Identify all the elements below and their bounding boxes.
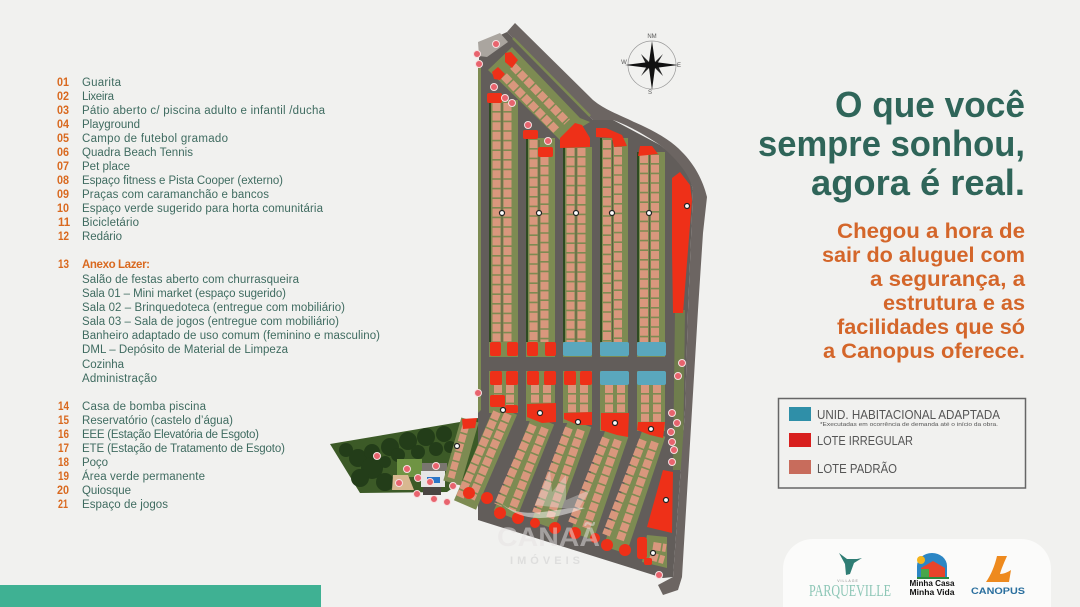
list item 06: Quadra Beach Tennis [82,147,193,159]
list item 07 [57,161,130,173]
compass rose: NM [647,34,657,40]
list item 01: 01 [57,77,70,89]
subheading: sair do aluguel com [822,244,1025,267]
list item 08: Espaço fitness e Pista Cooper (externo) [82,175,283,187]
legend: standard lot: LOTE PADRÃO [817,461,897,476]
location markers [374,40,686,578]
subheading: facilidades que só [837,316,1025,339]
subheading: Chegou a hora de [837,220,1025,243]
compass rose: S [648,90,652,96]
list item 19: 19 [58,471,69,483]
list item 12: 12 [58,231,69,243]
lot column 2 [526,138,555,357]
list item 13: anexo lazer: 13 [58,259,69,271]
list item 12 [58,231,122,243]
lot column 5 [637,152,665,357]
list item 08: 08 [57,175,70,187]
logo: Minha Casa Minha Vida: Minha Casa [910,578,955,588]
lot column 1 [489,100,518,357]
list item 13: anexo lazer: Anexo Lazer: [82,259,150,271]
list item 09: Praças com caramanchão e bancos [82,189,269,201]
inner green verge [513,38,590,116]
legend: irregular lot: LOTE IRREGULAR [817,433,913,448]
diagonal lot strips [451,410,655,550]
square markers [454,204,690,556]
bottom green bar [0,585,321,607]
list item 10: Espaço verde sugerido para horta comunitária [82,203,324,215]
legend: irregular lot [789,433,913,448]
site base [478,32,693,578]
list item 12: Redário [82,231,122,243]
list item 14: 14 [58,401,70,413]
list item 18: Poço [82,457,108,469]
irregular lots (red) [462,52,692,556]
list item 04: Playground [82,119,140,131]
list item 04 [57,119,140,131]
list item 15: Reservatório (castelo d’água) [82,415,233,427]
list item 16: 16 [58,429,69,441]
legend: adapted unit: *Executadas em ocorrência de demanda até o início da obra. [820,422,999,428]
subheading: estrutura e as [883,292,1025,315]
watermark: Canaã imóveis [497,470,600,567]
logo: Parque Ville: VILLAGE [837,579,859,583]
list item 20: Quiosque [82,485,131,497]
compass rose: W [621,60,627,66]
list item 14: Casa de bomba piscina [82,401,207,413]
list item 19: Área verde permanente [82,470,205,483]
list item 05: 05 [57,133,70,145]
list item 16: EEE (Estação Elevatória de Esgoto) [82,429,259,441]
amenities list [57,77,380,511]
logo: Canopus: CANOPUS [971,586,1025,597]
list item 13: anexo lazer: Banheiro adaptado de uso comum (feminino e masculino) [82,330,380,342]
logo card [783,539,1051,607]
list item 13: anexo lazer: DML – Depósito de Material de Limpeza [82,344,289,356]
list item 21: Espaço de jogos [82,499,168,511]
logo: Parque Ville [809,553,891,600]
list item 01 [57,77,122,89]
list item 03: Pátio aberto c/ piscina adulto e infantil /ducha [82,105,326,117]
list item 20: 20 [57,485,69,497]
list item 02: 02 [57,91,69,103]
list item 13: anexo lazer: Administração [82,373,157,385]
list item 13: anexo lazer: Sala 01 – Mini market (espaço sugerido) [82,288,286,300]
subheading: a segurança, a [870,268,1025,291]
legend [778,398,1026,488]
list item 01: Guarita [82,77,122,89]
legend: adapted unit [789,407,1000,428]
logo: Minha Casa Minha Vida: Minha Vida [910,587,955,597]
headline: agora é real. [811,162,1025,203]
list item 17: ETE (Estação de Tratamento de Esgoto) [82,443,285,455]
headline: sempre sonhou, [758,123,1025,164]
list item 13: anexo lazer: Salão de festas aberto com churrasqueira [82,274,300,286]
lot column 3 [563,147,592,357]
bottom right small block [637,535,667,568]
list item 17: 17 [58,443,69,455]
subheading: a Canopus oferece. [823,340,1025,363]
legend: adapted unit: UNID. HABITACIONAL ADAPTADA [817,407,1000,422]
list item 18: 18 [58,457,70,469]
list item 10: 10 [57,203,69,215]
list item 06: 06 [57,147,69,159]
list item 04: 04 [57,119,70,131]
logo: Minha Casa Minha Vida [910,553,955,597]
list item 13: anexo lazer: Sala 02 – Brinquedoteca (entregue com mobiliário) [82,302,345,314]
site map [330,23,707,595]
list item 07: Pet place [82,161,130,173]
list item 21: 21 [58,499,68,511]
watermark: Canaã imóveis: CANAÃ [497,521,600,552]
adapted units (blue) [563,342,666,385]
green preserved area wedge [330,418,478,495]
right side green strip [673,310,685,470]
list item 09: 09 [57,189,69,201]
list item 07: 07 [57,161,69,173]
list item 13: anexo lazer: Cozinha [82,359,125,371]
left green edge [478,60,481,413]
list item 11: Bicicletário [82,217,139,229]
list item 11: 11 [58,217,71,229]
perimeter road [507,23,707,595]
upper diagonal block [488,47,590,140]
list item 05: Campo de futebol gramado [82,133,228,145]
compass rose [621,34,681,96]
subheading [822,220,1025,363]
list item 18 [58,457,108,469]
compass rose: E [677,63,681,69]
guard house area [478,33,508,57]
watermark: Canaã imóveis: IMÓVEIS [510,554,580,567]
lower straight lots [489,371,665,431]
legend: standard lot [789,460,897,476]
list item 15: 15 [58,415,70,427]
logo: Canopus [971,556,1025,597]
lot column 4 [600,138,628,357]
list item 02 [57,91,115,103]
list item 02: Lixeira [82,91,115,103]
list item 03: 03 [57,105,69,117]
headline: O que você [835,84,1025,125]
list item 13: anexo lazer: Sala 03 – Sala de jogos (entregue com mobiliário) [82,316,339,328]
headline [758,84,1025,203]
list item 20 [57,485,131,497]
logo: Parque Ville: PARQUEVILLE [809,581,891,600]
list item 13: anexo lazer [58,259,380,385]
